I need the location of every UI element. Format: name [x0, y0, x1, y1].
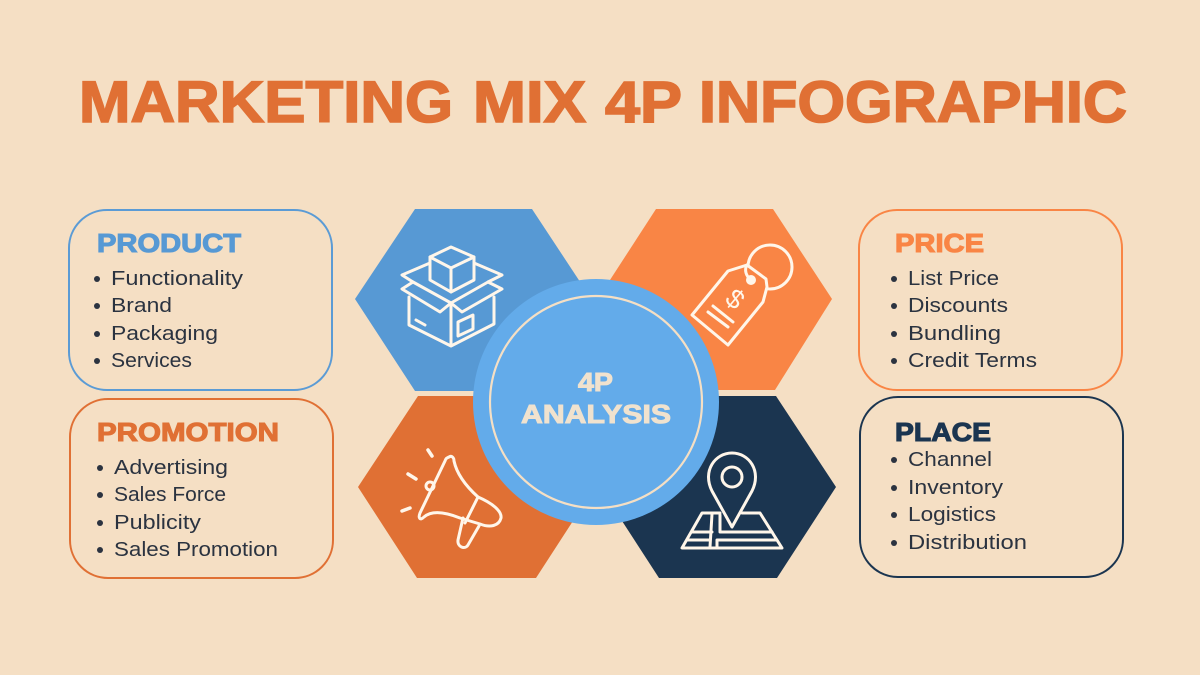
panel: product	[69, 210, 332, 390]
title	[79, 70, 1127, 135]
panel: place	[860, 397, 1123, 577]
list: price	[891, 268, 1037, 372]
center label: 4P	[578, 367, 613, 397]
title: MARKETING	[79, 70, 453, 135]
list: place: Channel	[908, 449, 992, 471]
hexagon: promotion	[358, 396, 595, 578]
list: promotion: Advertising	[114, 457, 228, 479]
list: product: Brand	[111, 295, 172, 317]
icon: map pin	[682, 453, 782, 548]
heading: price: PRICE	[895, 228, 984, 258]
list: promotion: Publicity	[114, 512, 201, 534]
center label	[521, 367, 671, 429]
icon: price tag: $	[720, 283, 750, 315]
title: MIX	[473, 70, 586, 135]
list: promotion: Sales Force	[114, 484, 226, 506]
title: 4P	[605, 70, 682, 135]
list: promotion: Sales Promotion	[114, 539, 278, 561]
panel: price	[859, 210, 1122, 390]
icon: open box	[402, 247, 502, 346]
hexagon: product	[355, 209, 592, 391]
heading: place: PLACE	[895, 417, 991, 447]
list: promotion	[97, 457, 278, 561]
list: place: Distribution	[908, 532, 1027, 554]
list: price: List Price	[908, 268, 999, 290]
hexagon: price	[597, 209, 832, 390]
list: product: Packaging	[111, 323, 218, 345]
list: place	[891, 449, 1027, 554]
list: product	[94, 268, 243, 372]
panel: promotion	[70, 399, 333, 578]
hexagon: place	[600, 396, 836, 578]
heading: product: PRODUCT	[97, 228, 241, 258]
list: price: Bundling	[908, 323, 1001, 345]
center circle	[473, 279, 719, 525]
list: place: Inventory	[908, 477, 1003, 499]
list: place: Logistics	[908, 504, 996, 526]
list: price: Credit Terms	[908, 350, 1037, 372]
list: product: Services	[111, 350, 192, 372]
list: product: Functionality	[111, 268, 243, 290]
icon: megaphone	[402, 450, 501, 547]
title: INFOGRAPHIC	[699, 70, 1127, 135]
heading: promotion: PROMOTION	[97, 417, 279, 447]
center label: ANALYSIS	[521, 399, 671, 429]
icon: price tag	[692, 245, 792, 345]
list: price: Discounts	[908, 295, 1008, 317]
